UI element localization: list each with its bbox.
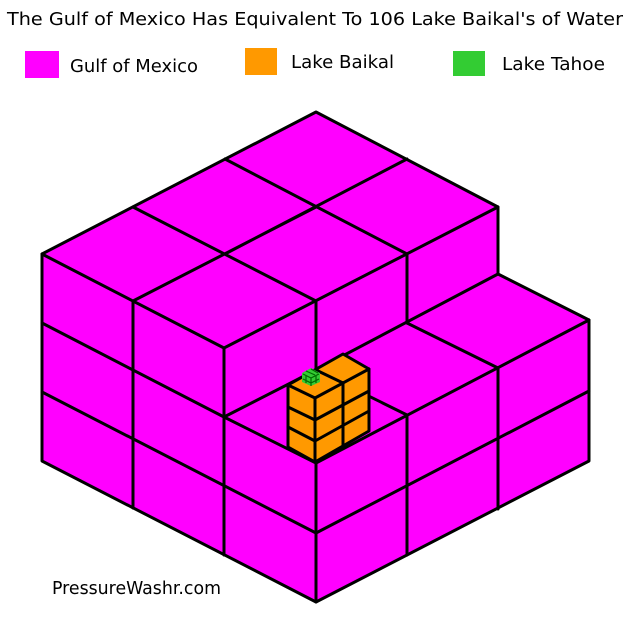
legend <box>25 48 605 78</box>
Gulf of Mexico isometric cube stack <box>42 112 589 602</box>
source credit: PressureWashr.com <box>52 578 221 599</box>
Lake Baikal block stack <box>288 354 369 462</box>
title: The Gulf of Mexico Has Equivalent To 106 Lake Baikal's of Water <box>6 9 624 30</box>
Lake Tahoe block <box>302 368 320 386</box>
legend: Lake Baikal <box>245 48 394 75</box>
legend: Gulf of Mexico: Gulf of Mexico <box>70 56 198 77</box>
legend: Gulf of Mexico <box>25 51 198 78</box>
legend: Lake Tahoe <box>453 51 605 76</box>
legend: Lake Baikal: Lake Baikal <box>291 52 394 73</box>
legend: Lake Tahoe: Lake Tahoe <box>502 54 605 75</box>
